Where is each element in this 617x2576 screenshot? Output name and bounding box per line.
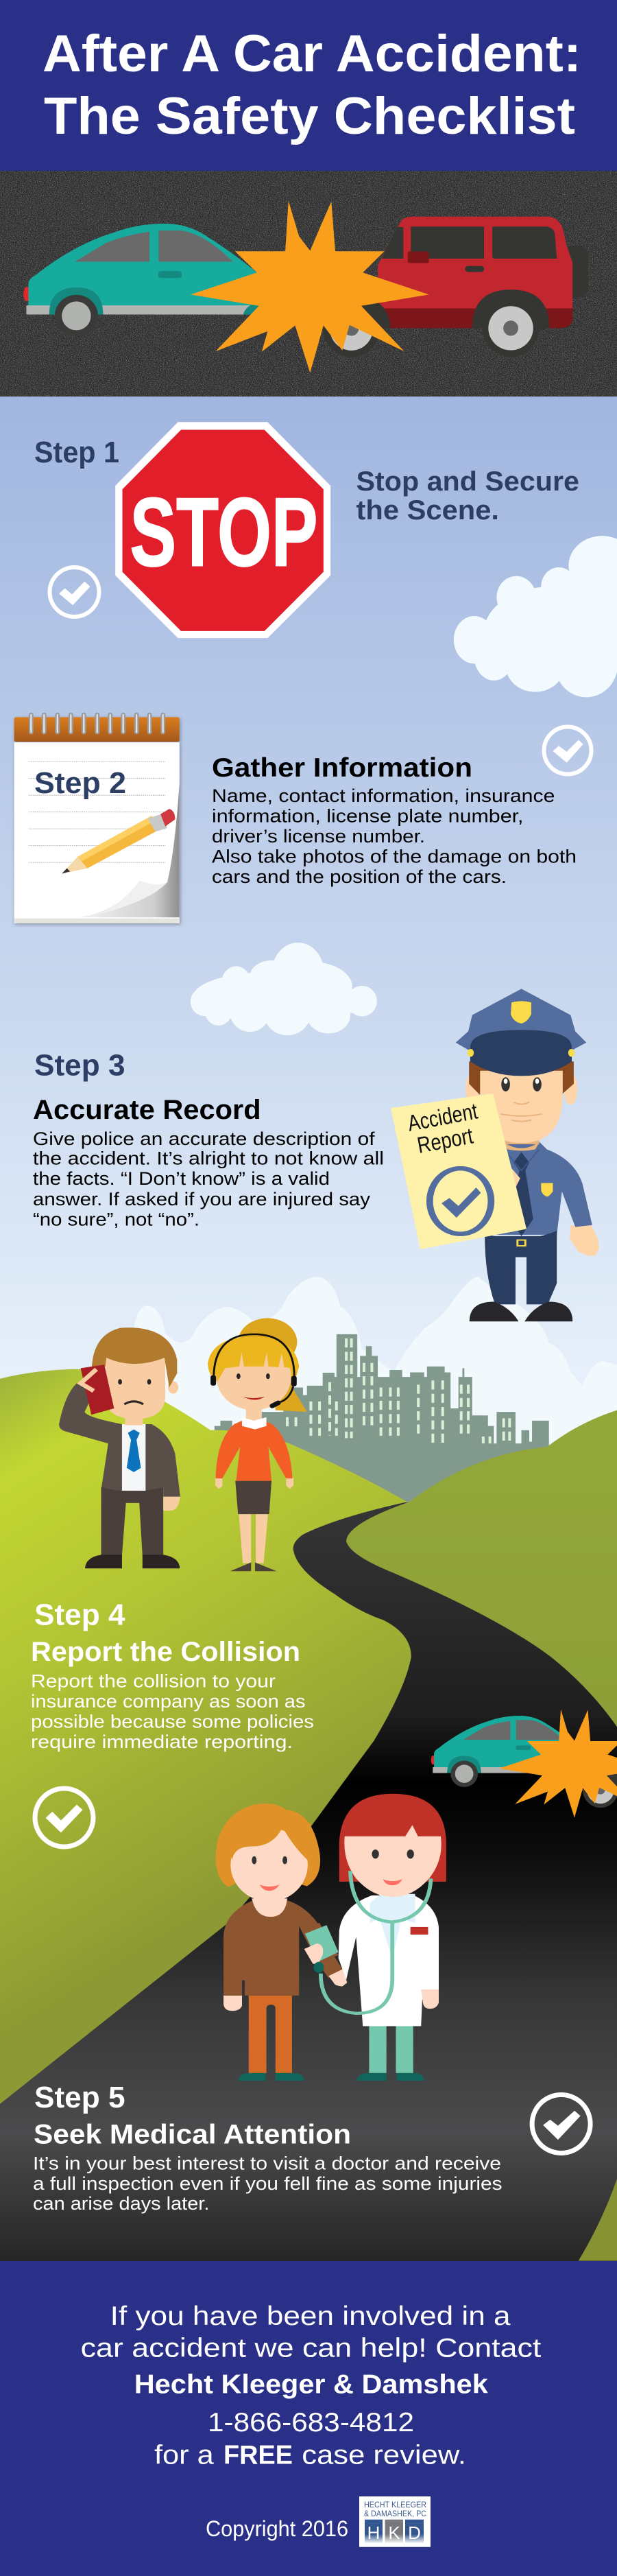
icon: check 3	[35, 1788, 93, 1847]
logo: Hecht Kleeger & Damashek: HECHT KLEEGER	[364, 2500, 426, 2509]
road and lower dark band	[0, 1502, 617, 2261]
step 3 body: “no sure”, not “no”.	[33, 1209, 199, 1229]
clouds behind the city	[110, 1277, 617, 1459]
step 4 heading: Report the Collision	[31, 1637, 300, 1667]
title: The Safety Checklist	[44, 87, 575, 145]
step 4 label: Step 4	[34, 1598, 125, 1631]
logo: Hecht Kleeger & Damashek: H	[367, 2522, 380, 2543]
illustration: doctor	[313, 1794, 446, 2081]
illustration: police officer with accident report: Accident	[405, 1098, 480, 1136]
step 5 body: a full inspection even if you fell fine as some injuries	[33, 2173, 502, 2194]
illustration: woman with headset	[208, 1318, 307, 1571]
step 2 body: information, license plate number,	[212, 805, 524, 826]
icon: stop sign: STOP	[130, 477, 318, 587]
footer call to action: Hecht Kleeger & Damshek	[134, 2370, 488, 2400]
step 4 body: require immediate reporting.	[31, 1732, 293, 1752]
step 4 body	[31, 1671, 314, 1752]
step 1 heading	[356, 466, 579, 525]
step 2 body	[212, 785, 577, 887]
step 3 body: answer. If asked if you are injured say	[33, 1189, 371, 1209]
footer call to action	[81, 2302, 541, 2470]
footer call to action: If you have been involved in a	[110, 2302, 511, 2331]
header band	[0, 0, 617, 171]
step 3 body	[33, 1129, 384, 1229]
step 2 heading: Gather Information	[212, 753, 472, 783]
logo: Hecht Kleeger & Damashek: & DAMASHEK, PC	[364, 2509, 426, 2518]
step 4 body: insurance company as soon as	[31, 1691, 306, 1712]
logo: Hecht Kleeger & Damashek: D	[408, 2522, 421, 2543]
illustration: man on phone	[59, 1327, 180, 1568]
step 1 label: Step 1	[34, 436, 119, 469]
step 3 body: Give police an accurate description of	[33, 1129, 375, 1149]
step 1 heading: the Scene.	[356, 495, 499, 525]
footer call to action: 1-866-683-4812	[208, 2408, 414, 2437]
footer band	[0, 2261, 617, 2576]
hill: left of road	[0, 1369, 411, 2104]
city skyline	[215, 1334, 563, 1520]
logo: Hecht Kleeger & Damashek	[359, 2496, 431, 2547]
icon: check 4	[532, 2095, 590, 2153]
step 3 label: Step 3	[34, 1049, 125, 1083]
sky background	[0, 397, 617, 1467]
illustration: police officer with accident report: Report	[415, 1122, 475, 1158]
hill: right of road	[346, 1410, 617, 1727]
title: After A Car Accident:	[43, 25, 581, 83]
footer call to action: for a	[154, 2441, 214, 2470]
footer call to action: FREE	[223, 2441, 293, 2470]
icon: notepad with pencil	[14, 715, 180, 923]
icon: check 1	[49, 567, 99, 617]
icon: check 2	[544, 727, 591, 774]
step 4 body: possible because some policies	[31, 1711, 314, 1732]
logo: Hecht Kleeger & Damashek: K	[388, 2522, 400, 2543]
asphalt hero with colliding cars	[0, 171, 617, 397]
icon: stop sign	[115, 422, 330, 638]
step 5 body: It’s in your best interest to visit a doctor and receive	[33, 2153, 501, 2173]
title	[43, 25, 581, 145]
step 4 body: Report the collision to your	[31, 1671, 276, 1692]
illustration: police officer with accident report	[391, 989, 599, 1321]
icon: small crash on the road	[431, 1710, 617, 1818]
step 1 heading: Stop and Secure	[356, 466, 579, 497]
footer call to action: car accident we can help! Contact	[81, 2334, 541, 2363]
step 2 body: Name, contact information, insurance	[212, 785, 555, 806]
cloud: right of step 1	[454, 536, 617, 697]
hill: bottom right corner	[579, 2179, 617, 2260]
step 3 body: the accident. It’s alright to not know all	[33, 1148, 384, 1169]
step 3 heading: Accurate Record	[33, 1095, 261, 1125]
step 5 heading: Seek Medical Attention	[34, 2120, 351, 2150]
step 3 body: the facts. “I Don’t know” is a valid	[33, 1168, 330, 1189]
step 5 label: Step 5	[34, 2081, 125, 2114]
footer call to action: case review.	[302, 2441, 466, 2470]
copyright: Copyright 2016	[206, 2516, 348, 2541]
step 5 body: can arise days later.	[33, 2193, 209, 2214]
step 2 body: Also take photos of the damage on both	[212, 847, 577, 867]
step 2 label: Step 2	[34, 766, 126, 800]
step 5 body	[33, 2153, 502, 2214]
step 2 body: driver’s license number.	[212, 826, 425, 847]
illustration: patient	[216, 1804, 347, 2081]
cloud: centre above step 3	[191, 943, 377, 1035]
step 2 body: cars and the position of the cars.	[212, 866, 507, 887]
